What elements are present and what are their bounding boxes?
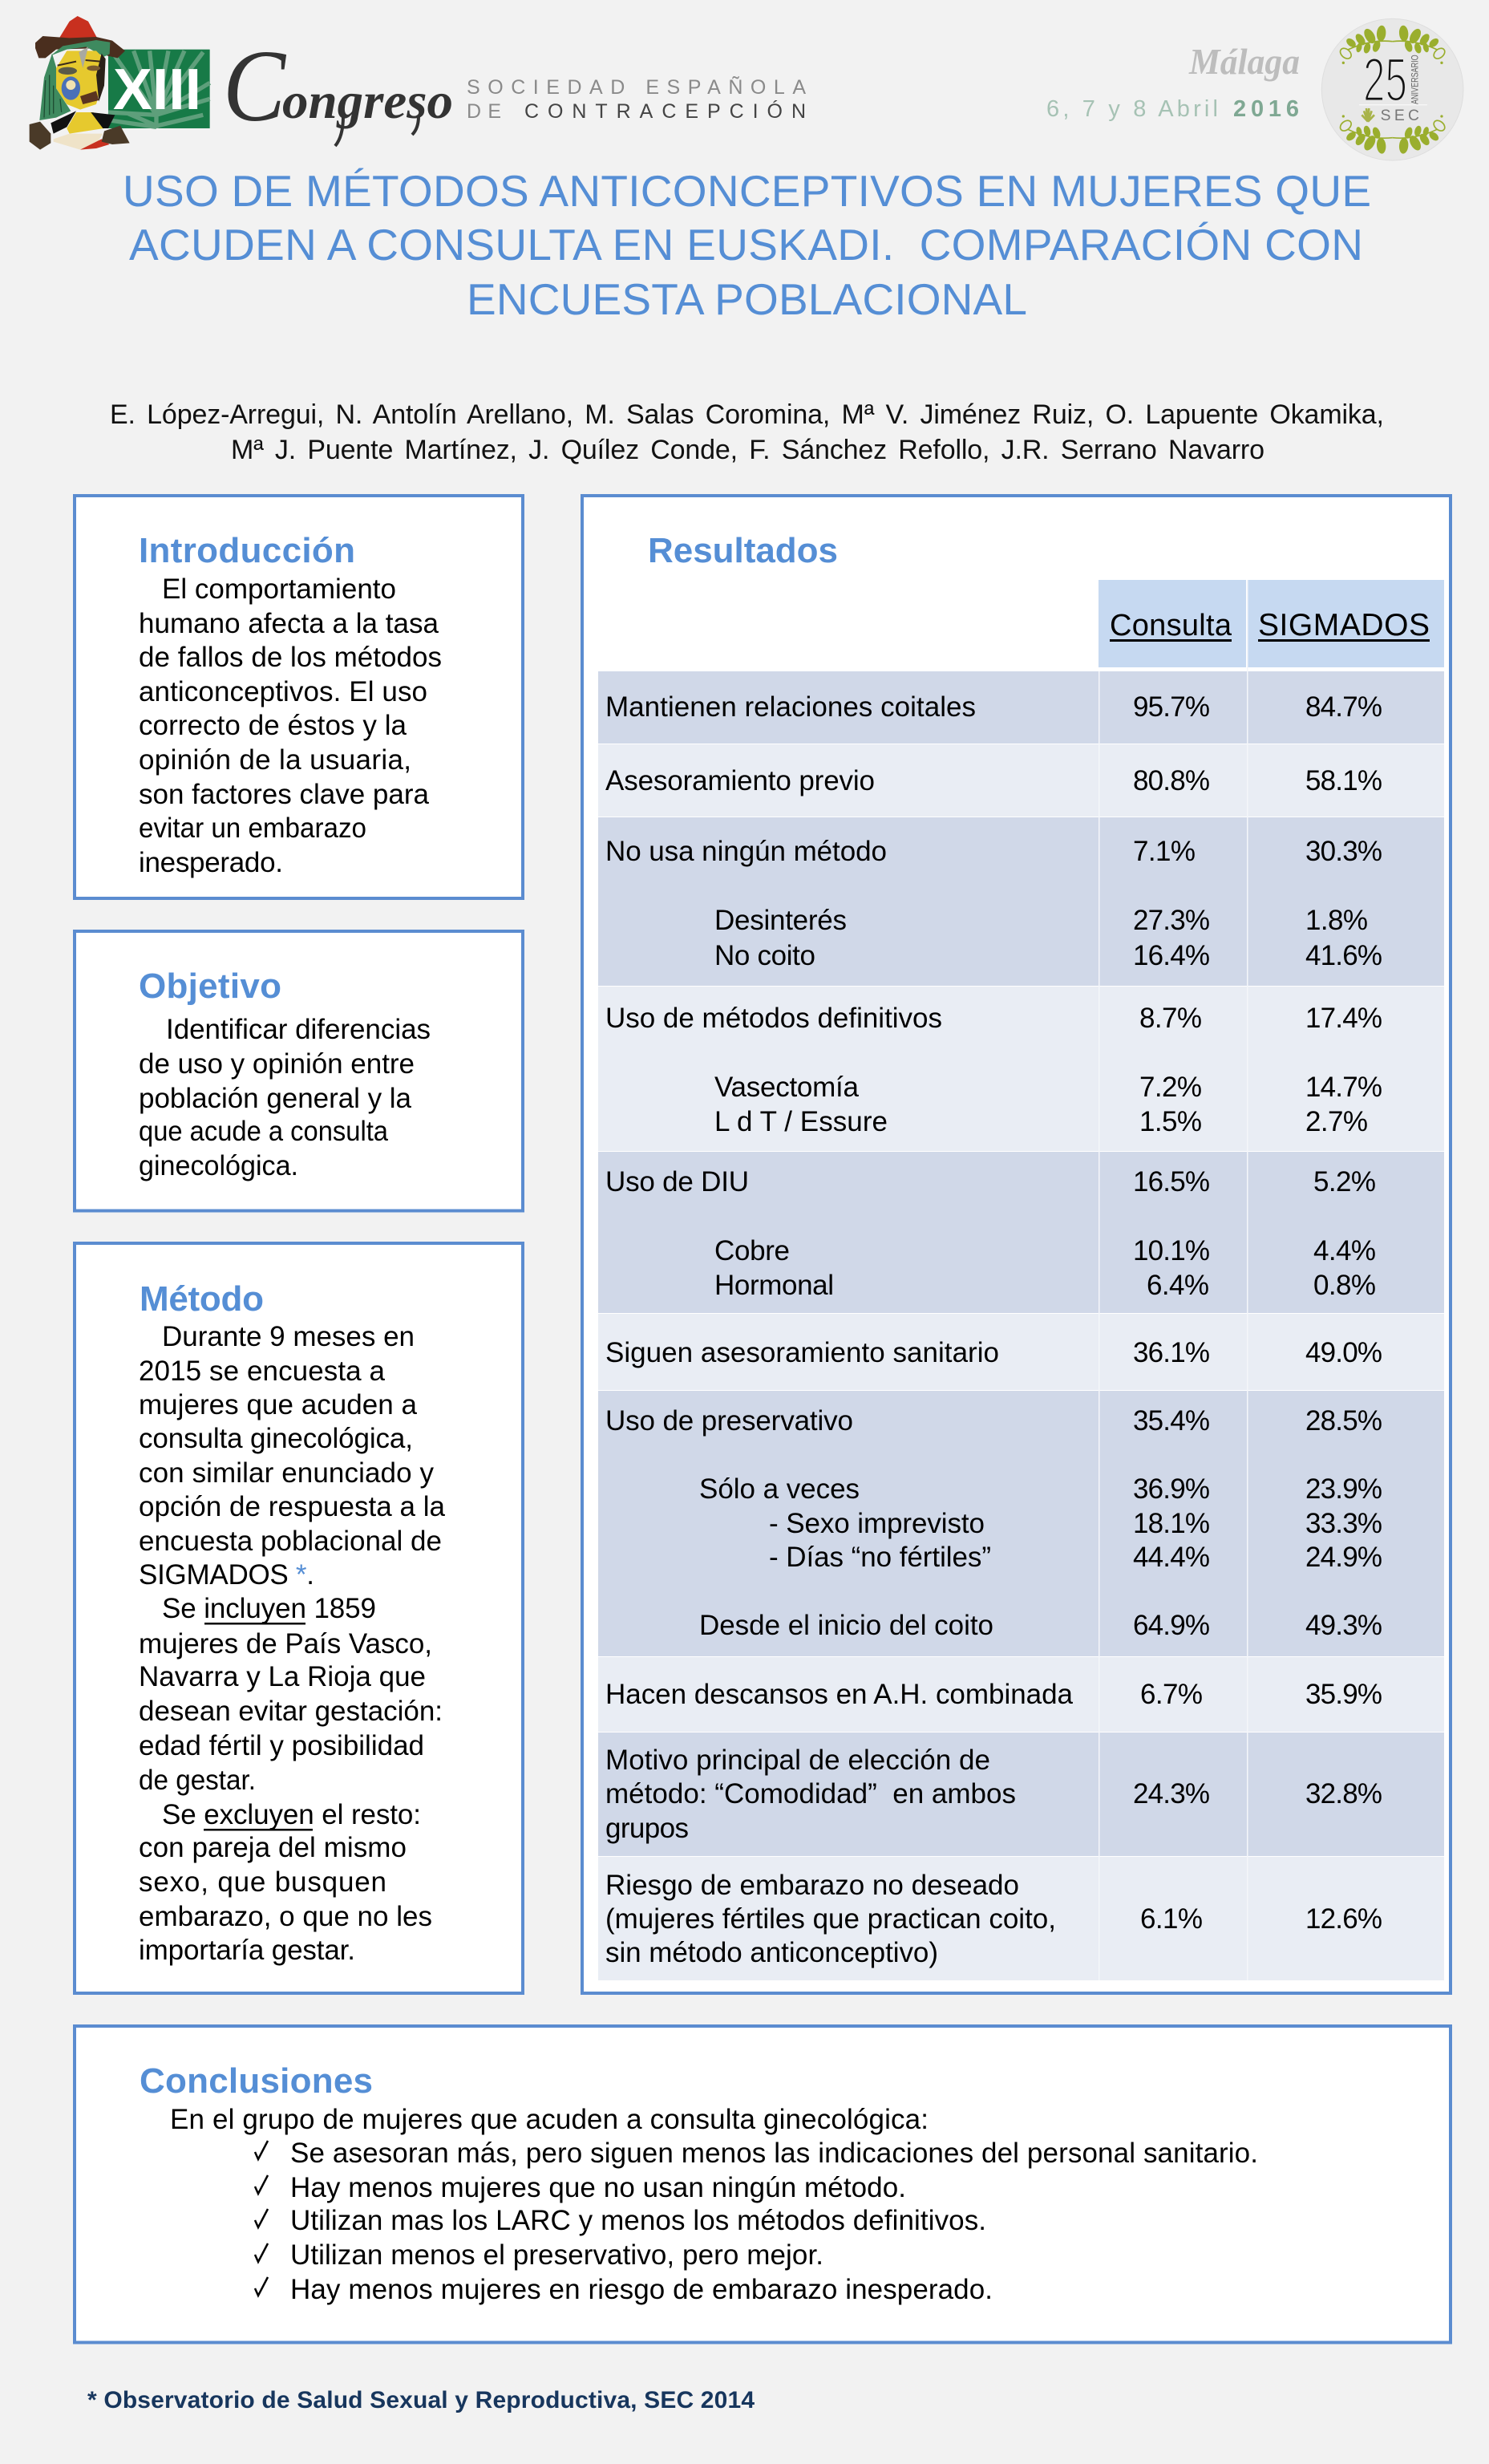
title [123,166,1371,324]
row: uso de preservativo: Sólo a veces [699,1473,860,1505]
row: siguen asesoramiento sanitario: 36.1% [1133,1337,1210,1368]
row: métodos definitivos: Vasectomía [714,1072,860,1103]
row: uso de DIU: Uso de DIU [605,1166,749,1198]
row: uso de preservativo: 28.5% [1305,1405,1382,1437]
heading: Conclusiones: Conclusiones [140,2061,373,2101]
heading: Introducción: Introducción [139,531,355,570]
row: uso de preservativo: 23.9% [1305,1473,1382,1505]
row: relaciones coitales: 84.7% [1305,691,1382,723]
row: no usa ningún método: 16.4% [1133,940,1210,971]
SEC label: SEC [1381,107,1419,124]
row: métodos definitivos: 17.4% [1305,1003,1382,1034]
row: uso de preservativo: Desde el inicio del coito [699,1610,993,1641]
authors: E. López-Arregui, N. Antolín Arellano, M. Salas Coromina, Mª V. Jiménez Ruiz, O. Lapuente Okamika, [110,399,1384,430]
text block: método: Navarra y La Rioja que [139,1661,426,1692]
text block: introducción: El comportamiento [162,573,396,605]
row: descansos en A.H. combinada: 35.9% [1305,1679,1382,1710]
list: conclusions: Utilizan menos el preservativo, pero mejor. [290,2239,823,2271]
XIII numeral: XIII [113,58,201,122]
row: uso de preservativo: 24.9% [1305,1542,1382,1573]
text block: objetivo [139,1014,431,1181]
logo: XIII Congreso [30,16,806,150]
row: relaciones coitales [598,671,1444,744]
row: no usa ningún método [598,817,1444,986]
text block: objetivo: Identificar diferencias [166,1014,431,1045]
row: uso de preservativo: Uso de preservativo [605,1405,853,1437]
row: no usa ningún método: 41.6% [1305,940,1382,971]
row: uso de preservativo: 44.4% [1133,1542,1210,1573]
row: motivo principal: 24.3% [1133,1778,1210,1810]
row: métodos definitivos: L d T / Essure [714,1106,888,1137]
society name [467,75,806,123]
event place and date: 2016 [1233,96,1299,122]
row: métodos definitivos: 1.5% [1139,1106,1202,1137]
row: no usa ningún método: 27.3% [1133,905,1210,936]
row: descansos en A.H. combinada: Hacen descansos en A.H. combinada [605,1679,1074,1710]
table header: SIGMADOS [1258,608,1430,642]
text block: introducción: evitar un embarazo [139,813,366,844]
row: relaciones coitales: 95.7% [1133,691,1210,723]
list: conclusions [255,2138,1258,2305]
row: métodos definitivos [598,987,1444,1151]
row: uso de DIU [598,1152,1444,1313]
text: conclusion intro: En el grupo de mujeres que acuden a consulta ginecológica: [170,2104,929,2135]
table header [1099,580,1444,667]
text block: método: mujeres de País Vasco, [139,1628,432,1660]
row: uso de DIU: 6.4% [1147,1270,1209,1301]
row: uso de preservativo: 33.3% [1305,1508,1382,1539]
row: no usa ningún método: 7.1% [1133,836,1196,867]
row: uso de preservativo: 18.1% [1133,1508,1210,1539]
row: uso de DIU: 0.8% [1313,1270,1376,1301]
table header: Consulta [1110,609,1232,642]
row: uso de preservativo: - Sexo imprevisto [769,1508,985,1539]
row: no usa ningún método: No usa ningún método [605,836,887,867]
row: uso de DIU: 5.2% [1313,1166,1376,1198]
society name: SOCIEDAD ESPAÑOLA [467,75,806,99]
text block: método: edad fértil y posibilidad [139,1730,424,1761]
list: conclusions: Hay menos mujeres en riesgo de embarazo inesperado. [290,2274,993,2305]
text block: método: encuesta poblacional de [139,1526,442,1557]
event place and date: Málaga [1188,41,1300,82]
row: asesoramiento previo: 80.8% [1133,765,1210,796]
society name: DE [467,100,501,123]
authors [110,399,1384,465]
title: ACUDEN A CONSULTA EN EUSKADI. COMPARACIÓN CON [129,220,1363,270]
row: uso de preservativo: - Días “no fértiles” [769,1542,991,1573]
text block: método [139,1321,446,1966]
row: uso de preservativo [598,1391,1444,1656]
heading: Método: Método [140,1279,264,1319]
icon: Picasso portrait with XIII green square [30,16,210,150]
row: métodos definitivos: 2.7% [1305,1106,1368,1137]
row: uso de preservativo: 49.3% [1305,1610,1382,1641]
text block: método: con similar enunciado y [139,1457,435,1489]
row: siguen asesoramiento sanitario [598,1314,1444,1390]
row: métodos definitivos: Uso de métodos definitivos [605,1003,942,1034]
row: asesoramiento previo [598,744,1444,817]
number 25: 25 [1363,46,1407,115]
row: motivo principal: 32.8% [1305,1778,1382,1810]
row: métodos definitivos: 7.2% [1139,1072,1202,1103]
row: riesgo de embarazo: 12.6% [1305,1903,1382,1935]
row: no usa ningún método: 1.8% [1305,905,1368,936]
text block: introducción: anticonceptivos. El uso [139,676,427,707]
row: no usa ningún método: No coito [714,940,815,971]
heading: Resultados: Resultados [648,531,838,570]
row: riesgo de embarazo: (mujeres fértiles que practican coito, [605,1903,1056,1935]
text block: método: importaría gestar. [139,1935,355,1966]
row: métodos definitivos: 8.7% [1139,1003,1202,1034]
text block: introducción: correcto de éstos y la [139,710,407,741]
panel: resultados [582,496,1451,1993]
text block: introducción: opinión de la usuaria, [139,744,411,776]
authors: Mª J. Puente Martínez, J. Quílez Conde, F. Sánchez Refollo, J.R. Serrano Navarro [231,435,1264,465]
icon: agave [1362,108,1374,122]
row: no usa ningún método: Desinterés [714,905,847,936]
row: descansos en A.H. combinada: 6.7% [1140,1679,1203,1710]
title: ENCUESTA POBLACIONAL [467,274,1027,324]
row: riesgo de embarazo: 6.1% [1140,1903,1203,1935]
row: uso de DIU: Cobre [714,1235,790,1266]
table: results [598,580,1444,1980]
event place and date: 6, 7 y 8 Abril [1046,96,1218,122]
list: conclusions: Hay menos mujeres que no usan ningún método. [290,2172,906,2203]
row: siguen asesoramiento sanitario: 49.0% [1305,1337,1382,1368]
text block: objetivo: que acude a consulta [139,1116,388,1147]
text block: objetivo: población general y la [139,1083,412,1114]
row: uso de DIU: 16.5% [1133,1166,1210,1198]
text block: introducción: son factores clave para [139,779,430,810]
list: conclusions: Se asesoran más, pero siguen menos las indicaciones del personal sanitario. [290,2138,1258,2169]
row: descansos en A.H. combinada [598,1657,1444,1732]
row: motivo principal [598,1732,1444,1856]
text block: introducción [139,573,442,878]
row: métodos definitivos: 14.7% [1305,1072,1382,1103]
heading: Objetivo: Objetivo [139,967,281,1006]
text block: método: embarazo, o que no les [139,1901,432,1932]
row: uso de DIU: Hormonal [714,1270,834,1301]
row: uso de preservativo: 64.9% [1133,1610,1210,1641]
text block: método: con pareja del mismo [139,1832,407,1863]
Congreso script wordmark: C [223,29,286,143]
text block: método: SIGMADOS *. [139,1559,314,1591]
text block: método: mujeres que acuden a [139,1389,418,1420]
row: motivo principal: grupos [605,1813,689,1844]
row: uso de preservativo: 35.4% [1133,1405,1210,1437]
text block: método: 2015 se encuesta a [139,1356,386,1387]
text block: método: opción de respuesta a la [139,1491,446,1522]
text block: objetivo: ginecológica. [139,1150,298,1181]
row: asesoramiento previo: Asesoramiento previo [605,765,875,796]
aniversario label: ANIVERSARIO [1410,55,1421,104]
icon: 25 aniversario SEC badge [1321,18,1463,160]
text block: introducción: humano afecta a la tasa [139,608,439,639]
row: siguen asesoramiento sanitario: Siguen asesoramiento sanitario [605,1337,999,1368]
text block: método: Durante 9 meses en [162,1321,415,1352]
text block: método: Se incluyen 1859 [162,1593,376,1624]
row: asesoramiento previo: 58.1% [1305,765,1382,796]
text block: método: consulta ginecológica, [139,1423,413,1454]
row: relaciones coitales: Mantienen relaciones coitales [605,691,976,723]
event place and date [1046,41,1300,122]
row: no usa ningún método: 30.3% [1305,836,1382,867]
footnote: * Observatorio de Salud Sexual y Reproductiva, SEC 2014 [87,2387,755,2413]
text block: introducción: de fallos de los métodos [139,642,442,673]
panel: método [75,1243,523,1993]
title: USO DE MÉTODOS ANTICONCEPTIVOS EN MUJERES QUE [123,166,1371,216]
text block: método: sexo, que busquen [139,1866,386,1898]
row: uso de DIU: 10.1% [1133,1235,1210,1266]
row: motivo principal: método: “Comodidad” en ambos [605,1778,1016,1810]
society name: CONTRACEPCIÓN [524,99,806,123]
panel: objetivo [75,931,523,1211]
Congreso script wordmark [223,29,453,146]
text block: introducción: inesperado. [139,847,283,878]
panel: conclusiones [75,2026,1451,2342]
row: riesgo de embarazo: sin método anticonceptivo) [605,1937,938,1968]
text block: método: Se excluyen el resto: [162,1799,421,1830]
list: conclusions: Utilizan mas los LARC y menos los métodos definitivos. [290,2205,986,2236]
Congreso script wordmark: ongreso [282,72,453,129]
text block: método: de gestar. [139,1765,256,1796]
text block: objetivo: de uso y opinión entre [139,1048,415,1080]
row: motivo principal: Motivo principal de elección de [605,1745,990,1776]
row: uso de preservativo: 36.9% [1133,1473,1210,1505]
row: riesgo de embarazo: Riesgo de embarazo no deseado [605,1870,1019,1901]
panel: introducción [75,496,523,898]
row: uso de DIU: 4.4% [1313,1235,1376,1266]
text block: método: desean evitar gestación: [139,1696,443,1727]
row: riesgo de embarazo [598,1857,1444,1980]
